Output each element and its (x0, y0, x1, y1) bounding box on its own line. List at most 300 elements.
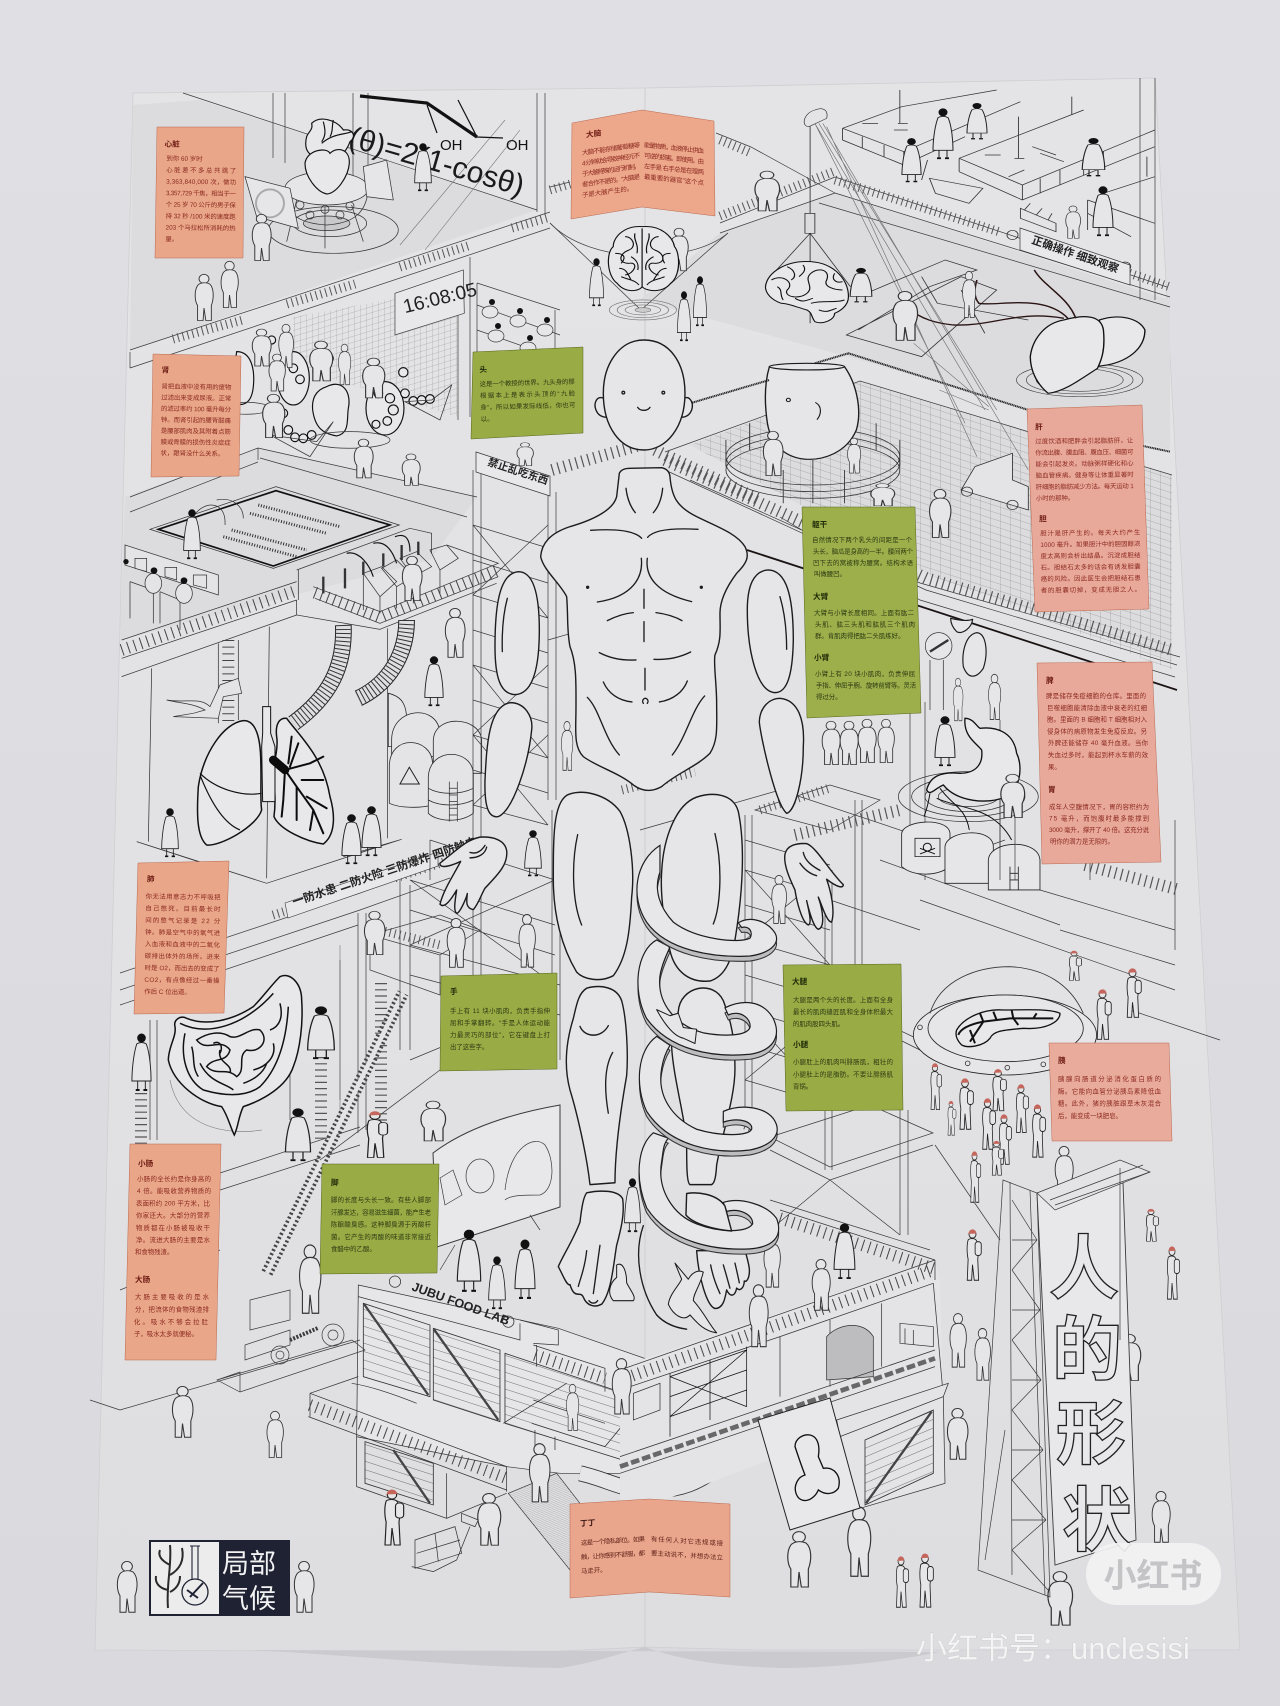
head text (479, 362, 576, 423)
thigh text: 背锅。 (793, 1082, 812, 1091)
thigh text (792, 976, 894, 1091)
stomach (927, 718, 1020, 801)
plate bolts (918, 1025, 1046, 1070)
pancreas text (1058, 1055, 1162, 1120)
rail and beams (620, 1210, 945, 1508)
spiral coil 4 (639, 1133, 779, 1254)
title text: shape of humans: 的 (1052, 1311, 1122, 1389)
lungs text: 作后 C 位出道。 (144, 987, 191, 996)
horizontal pipe (837, 1383, 948, 1437)
title text: shape of humans: 状 (1062, 1482, 1132, 1560)
pancreas text: 糖。此外，猪的胰脏跟草木灰混合 (1058, 1099, 1162, 1108)
top left railing of scaffold (552, 445, 760, 500)
face (622, 391, 665, 410)
liver text: 胆汁是肝产生的。每天大约产生 (1040, 527, 1141, 538)
left thigh (553, 792, 633, 980)
ladders (141, 983, 381, 1145)
note text left half (580, 1515, 646, 1576)
left hand (440, 837, 507, 913)
torso (541, 468, 747, 790)
torso text: 大臂 (813, 591, 829, 601)
panel: liver and gallbladder (1027, 405, 1149, 612)
liver operating table (846, 260, 1028, 357)
liver text: 者的胆囊切掉，变成无胆之人。 (1041, 584, 1141, 595)
spiral coil 1 (637, 845, 777, 961)
intestine text: 分，把流体的食物残渣排 (135, 1304, 210, 1313)
cerebrum text right half (644, 140, 705, 187)
scissor platform posts (535, 1355, 605, 1378)
upper right lab structure (550, 78, 1170, 310)
upper right railings (550, 140, 1170, 287)
tanks (388, 693, 482, 820)
vertical fold line (644, 88, 646, 1647)
bronchial tree (273, 737, 327, 833)
cerebrum text left half: 于大脑特殊的运行机制， (582, 161, 640, 178)
torso text: 小臂上有 20 块小肌肉，负责伸屈 (815, 669, 915, 678)
kidney text: 钟。而肾引起的腰背酸痛 (161, 415, 232, 425)
note text left half: 触，让你感到不舒服，都 (581, 1548, 646, 1561)
scaffold railing (745, 788, 830, 1135)
cerebrum text left half: 大脑 (586, 127, 602, 139)
lung hall with pool, desks and tanks (122, 487, 498, 883)
fence ring (726, 423, 900, 503)
warning triangle (400, 767, 419, 784)
formula on back wall: (θ)=2(1-cosθ) (345, 121, 528, 203)
foot text: 脚 (331, 1177, 339, 1187)
statue face (786, 398, 820, 419)
pancreas (956, 1010, 1060, 1047)
desk operator heads (123, 559, 187, 584)
main dark beam (747, 550, 1177, 690)
lung left lobe (197, 721, 262, 845)
right foot toes (711, 1263, 739, 1294)
safety beam under lungs (120, 860, 450, 1005)
panel: hand (440, 973, 557, 1071)
human figure (440, 340, 843, 1333)
paper fold shadow (250, 1647, 940, 1668)
cerebrum text right half: 左手是 右手总是在理两 (644, 161, 705, 176)
note text left half: 丁丁 (580, 1518, 596, 1528)
left foot (558, 1191, 623, 1306)
cerebrum text right half: 能量物质，血液停止供血 (644, 140, 705, 155)
liver text: 你流出腹、腹血阻、腹血压、细菌可 (1035, 447, 1134, 457)
logo text: 气候 (222, 1584, 276, 1614)
logo (149, 1540, 290, 1616)
kidney text: 过滤出来变成尿液。正常 (161, 393, 231, 403)
title text: shape of humans: 形 (1056, 1395, 1126, 1473)
pancreas exhibit (913, 967, 1097, 1075)
head text: 以。 (481, 416, 494, 423)
lab wall (357, 1285, 649, 1473)
food lab left side (308, 1276, 710, 1572)
thigh text: 的肌肉股四头肌。 (793, 1019, 844, 1028)
lungs text: 碳排出体外的场所。进来 (145, 951, 220, 961)
head statue (765, 363, 859, 459)
lab arch tube (827, 1325, 873, 1380)
stomach tubes (924, 788, 1012, 840)
liver text: 度太高则会析出结晶。沉淀成胆结 (1040, 550, 1141, 560)
head text: 根据本上是表示头顶的“九脸 (480, 388, 576, 400)
torso text: 叫做腰凹。 (814, 569, 846, 578)
walkway beam and railing (122, 528, 498, 677)
shutter panels (363, 1303, 644, 1505)
tanks with hazard (902, 822, 1040, 890)
kidney text: 膜或骨膜的损伤性炎症症 (161, 437, 231, 447)
spiral coil 3 (639, 1036, 777, 1156)
liver text: 小时的那种。 (1036, 493, 1074, 503)
cerebrum text right half: 最重要的器官”这个点 (644, 172, 705, 187)
spiral bottom tail (639, 1226, 687, 1329)
machines on platform (323, 542, 458, 613)
foot text (331, 1177, 432, 1253)
leg and foot lines (574, 834, 720, 1303)
liver rings (1016, 363, 1143, 397)
head and torso (485, 340, 804, 817)
zig-zag stairs (267, 993, 403, 1273)
torso text: 自然情况下两个乳头的间距是一个 (812, 535, 913, 544)
kidney text: 肾把血液中没有用的废物 (161, 382, 232, 391)
spleen text: 胃 (1048, 785, 1056, 794)
kidneys (230, 352, 404, 436)
kidney text: 是腰部肌肉及其附着点筋 (161, 426, 231, 436)
floor edges (665, 381, 1180, 677)
liver text: 能会引起发炎。动脉粥样硬化和心 (1035, 458, 1134, 468)
central left scaffold (320, 470, 620, 1160)
top left heart room structure (130, 93, 550, 368)
lung fissures (200, 773, 262, 830)
title tower with banner (978, 1160, 1150, 1597)
cerebrum text left half: 者合作不是的。“大脑是 (582, 172, 641, 189)
panel: heart (155, 127, 244, 258)
spleen text: 巨噬细胞能清除血液中衰老的红细 (1047, 703, 1147, 712)
head text: 身”，所以如果发际线低，你也可 (480, 400, 576, 412)
held upper arm (963, 633, 986, 676)
note text right half: 有任何人对它违规或接 (651, 1534, 724, 1548)
spiral coil 2 (638, 940, 776, 1060)
right forearm (759, 698, 804, 813)
note text right half: 要主动说不，并想办法立 (651, 1548, 724, 1562)
hand text: 出了这些字。 (450, 1042, 488, 1051)
trachea (262, 707, 275, 802)
heart text: 心脏差不多总共跳了 (166, 165, 236, 175)
pancreas text: 酶。它能向血管分泌胰岛素降低血 (1058, 1086, 1162, 1095)
liver text: 脑血管疾病。健身等让体重显著时 (1036, 470, 1134, 480)
head text: 头 (479, 364, 487, 374)
intestine text: 子，吸水太多就便秘。 (134, 1329, 198, 1338)
cerebrum text left half: 4 分钟就会导致神经元不 (582, 150, 641, 168)
liver text: 石。胆结石太多的话会有诱发胆囊 (1041, 562, 1141, 572)
foot text: 汗腺发达，容易滋生细菌，能产生老 (331, 1207, 432, 1216)
platform near hand (370, 915, 480, 995)
cerebrum text left half: 大脑不能存储葡萄糖等 (582, 140, 641, 157)
heart text: 203 个马拉松所消耗的热 (165, 223, 236, 232)
hand text: 力最灵巧的部位”，它在键盘上打 (450, 1030, 551, 1039)
watermark pill: 小红书 (1104, 1557, 1202, 1594)
lungs text: 时是 O2，而出去的变成了 (145, 963, 220, 973)
sign: correct operation: 正确操作 细致观察 (1030, 233, 1121, 275)
machine cables (347, 535, 410, 577)
rings (898, 772, 1038, 822)
torso text: 得过分。 (816, 692, 842, 701)
left upper arm (495, 572, 539, 695)
kidney text: 肾 (162, 366, 170, 375)
control room desks (489, 299, 550, 341)
hand text: 手上有 11 块小肌肉，负责手指伸 (450, 1006, 550, 1015)
intestine text: 净。流进大肠的主要是水 (136, 1235, 211, 1244)
torso text: 头肌、肱三头肌和肱肌三个肌肉 (815, 620, 915, 628)
safety sign: 一防水患 二防火险 三防爆炸 四防触电 (291, 834, 479, 909)
panel: pancreas (1049, 1043, 1172, 1141)
liver (1030, 317, 1145, 393)
sitting figure (610, 1264, 634, 1301)
stairs inner clear (267, 993, 403, 1273)
tanks with ladder (1000, 800, 1015, 880)
torso text: 手指、伸屈手腕、旋转前臂等。灵活 (816, 680, 917, 690)
torso text: 凹下去的窝被称为腰窝。结构术语 (813, 558, 914, 567)
right lower leg (672, 988, 735, 1185)
bench scaffold railing (380, 930, 440, 945)
people (117, 103, 1180, 1625)
panel: foot (320, 1164, 439, 1274)
liver text: 肝细胞的脂肪减少方法。每天运动 1 (1036, 481, 1134, 491)
cerebrum text left half: 子是大脑产生的。 (582, 183, 633, 199)
panel: small and large intestine (125, 1144, 221, 1360)
foot text: 食醋中的乙酸。 (331, 1244, 376, 1253)
panel: thigh and calf (783, 964, 903, 1111)
note text right half (651, 1534, 724, 1562)
pancreas text: 胰 (1058, 1055, 1066, 1065)
heart text: 3,363,840,000 次，做功 (166, 177, 236, 186)
right hose (358, 620, 407, 698)
molecule diagram: OH (506, 137, 528, 154)
lung box walls (137, 627, 402, 883)
kidney balls (268, 336, 434, 443)
right stomach hall structure (880, 700, 1220, 1040)
hand text (450, 986, 551, 1051)
spleen text: 胞。里面的 B 细胞和 T 细胞相对入 (1047, 715, 1148, 724)
pancreatic duct (958, 1010, 1053, 1043)
crate stack (412, 1513, 478, 1572)
note text left half: 马走开。 (581, 1566, 607, 1575)
desks (125, 545, 218, 630)
kidney text: 状，跟肾没什么关系。 (160, 448, 224, 458)
logo text (222, 1549, 276, 1614)
upper right laboratory tables (843, 90, 1155, 271)
intestine text: 化。吸水不够会拉肚 (134, 1317, 209, 1326)
intestine text: 小肠的全长约是你身高的 (137, 1174, 211, 1183)
intestine text: 大肠 (135, 1274, 151, 1284)
heart text (163, 139, 237, 244)
panel: head (471, 347, 583, 439)
scissor platform (503, 1345, 643, 1450)
brain side view (765, 261, 848, 323)
ears (595, 398, 692, 417)
panel: lungs (134, 861, 229, 1014)
skull (920, 843, 935, 854)
stomach exhibit (898, 618, 1040, 890)
intestine room structure (120, 913, 366, 1290)
intestine text: 4 倍。能吸收营养物质的 (137, 1186, 211, 1195)
scientist behind brain (670, 228, 688, 271)
heart text: 心脏 (165, 139, 180, 149)
ladder sides (218, 640, 238, 723)
railing along walkway (665, 460, 1172, 650)
watermark account: 小红书号：unclesisi (916, 1631, 1190, 1666)
torso text: 头长，脑瓜是身高的一半。腰间两个 (813, 546, 914, 555)
spleen text: 脾 (1046, 675, 1054, 685)
crane body (961, 453, 1028, 510)
wall tone of floors (120, 100, 1172, 660)
kidney room mesh wall (293, 287, 458, 417)
dome (930, 967, 1083, 1013)
hand text: 屈和手掌翻转。“手是人体运动能 (450, 1018, 551, 1027)
clock: 16:08:05 (401, 280, 479, 318)
brain top view (608, 226, 679, 291)
kidney platform (223, 402, 390, 448)
lab signage band (358, 1276, 558, 1345)
sign: no eating (476, 452, 550, 496)
spleen text (1046, 675, 1150, 846)
spleen text: 失血过多时，能起到杯水车薪的效 (1048, 750, 1149, 759)
lungs text: 入血液和血液中的二氧化 (145, 939, 221, 949)
lungs text: 间的憋气记录是 22 分 (145, 915, 221, 925)
panel: cerebrum (571, 110, 715, 219)
diver (167, 678, 242, 718)
JUBU FOOD LAB sign: JUBU FOOD LAB (410, 1280, 511, 1328)
stomach hall railing (795, 810, 1180, 890)
big pipe fill (580, 1473, 710, 1491)
panel: kidney (151, 354, 241, 477)
sign: correct operation (1020, 228, 1130, 285)
barrier rope (692, 353, 1170, 452)
crane hook (767, 127, 850, 323)
heart text: 量。 (165, 235, 178, 243)
thigh text: 大腿 (792, 976, 808, 986)
pancreas text: 胰腺向肠道分泌消化蛋白质的 (1058, 1074, 1161, 1083)
spleen text: 侵身体的病原物发生免疫反应。另 (1047, 726, 1147, 735)
bottom stairs (508, 1473, 580, 1570)
spleen text: 果。 (1048, 763, 1061, 771)
torso text (812, 519, 917, 701)
right upper arm (747, 570, 793, 693)
spleen text: 明你的潜力是无限的。 (1050, 836, 1114, 846)
clock (395, 270, 479, 335)
lungs text: CO2，有点像经过一番操 (144, 975, 220, 985)
heart text: 个 25 岁 70 公斤的男子保 (166, 200, 236, 209)
big pipe (580, 1473, 710, 1491)
crane cables (804, 109, 1028, 470)
food lab right side (620, 1210, 948, 1517)
kidney text (160, 366, 232, 458)
beam railings lower (273, 860, 450, 915)
shutter door (865, 1410, 933, 1505)
foot text: 脚的长度与头长一致。有些人脚部 (331, 1195, 432, 1204)
liver text: 过度饮酒和肥胖会引起脂肪肝，让 (1035, 436, 1134, 446)
hand text: 手 (450, 986, 458, 996)
intestine text: 和食物残渣。 (135, 1247, 173, 1256)
panel: torso and arms (802, 507, 921, 718)
left lower leg (566, 987, 627, 1185)
cerebrum text right half: 可逆的损害。即使用，由 (644, 151, 704, 166)
control panel (900, 1323, 933, 1347)
lung right lobe (273, 718, 333, 844)
foot text: 菌。它产生的丙酸的味道非常接近 (331, 1232, 432, 1241)
liver tubes (906, 270, 1076, 325)
head (603, 340, 685, 450)
heart text: 3,357,729 千焦，相当于一 (166, 188, 237, 198)
liver text: 1000 毫升。如果胆汁中的胆固醇浓 (1040, 539, 1141, 549)
liver text: 肝 (1035, 422, 1043, 432)
molecule diagram (360, 96, 528, 154)
lungs text: 肺 (147, 874, 155, 884)
intestine text: 大肠主要吸收的是水 (135, 1292, 210, 1301)
thigh text: 小腿肚上的肌肉叫腓肠肌，粗壮的 (793, 1057, 893, 1066)
spleen text: 75 毫升，而饱腹时最多能撑到 (1049, 814, 1149, 822)
posts along lab rail (620, 1218, 933, 1380)
logo text: 局部 (222, 1549, 276, 1579)
lungs text: 你无法用意志力不呼吸把 (146, 892, 221, 902)
kidney text: 的滤过率约 100 毫升每分 (161, 404, 232, 414)
intestine text: 表面积约 200 平方米，比 (136, 1198, 211, 1207)
oval posts (620, 1358, 935, 1467)
spleen text: 3000 毫升，撑开了 40 倍。这充分说 (1049, 825, 1150, 834)
lungs text: 钟。肺是空气中的氧气进 (145, 927, 221, 937)
lungs text: 自己憋死。目前最长时 (145, 903, 221, 913)
panel: penis note (570, 1499, 730, 1598)
spleen text: 外脾还能储存 40 毫升血液。当你 (1048, 738, 1149, 747)
shutter braces (364, 1304, 498, 1503)
plate (913, 995, 1097, 1075)
heart platform (245, 160, 398, 253)
left hose (293, 625, 343, 723)
railing posts (122, 570, 498, 650)
thigh text: 小腿肚上的是脂肪。不要让腓肠肌 (793, 1069, 894, 1078)
thigh text: 小腿 (793, 1039, 809, 1049)
intestine text (134, 1158, 211, 1338)
cerebrum text left half (582, 122, 641, 199)
display board (433, 1105, 560, 1270)
tower scaffold (978, 1160, 1150, 1597)
head statue group (608, 109, 1170, 510)
muscle lines (587, 488, 705, 755)
panel: spleen and stomach (1037, 662, 1161, 864)
arm lines (502, 597, 787, 652)
ladder (210, 640, 246, 723)
title text: shape of humans: 人 (1049, 1230, 1119, 1308)
figure at bottom of spiral (668, 1263, 717, 1333)
liver text: 胆 (1039, 514, 1047, 524)
lungs text (144, 874, 222, 997)
heart text: 到你 60 岁时 (166, 154, 203, 163)
heart exhibit (223, 119, 479, 457)
beam railings (173, 218, 547, 339)
tank ladder (449, 782, 457, 822)
intestine folds (180, 993, 288, 1095)
palm lines (470, 845, 820, 876)
control room operators (482, 306, 553, 354)
kidney carts (270, 385, 452, 457)
liver text: 癌的风险。因此医生会把胆结石患 (1041, 573, 1141, 583)
loading cart (90, 1290, 365, 1410)
torso text: 群。肯肌肉得把肱二头肌练好。 (815, 631, 904, 640)
heart (305, 119, 353, 194)
thigh text: 大腿是两个头的长度。上面有全身 (793, 995, 893, 1004)
right thigh (661, 794, 742, 981)
thigh text: 最长的肌肉缝匠肌和全身体积最大 (793, 1007, 894, 1016)
logo illustration (151, 1542, 219, 1614)
legs and spiral (440, 792, 843, 1333)
spleen text: 脾是储存免疫细胞的仓库。里面的 (1046, 691, 1146, 700)
